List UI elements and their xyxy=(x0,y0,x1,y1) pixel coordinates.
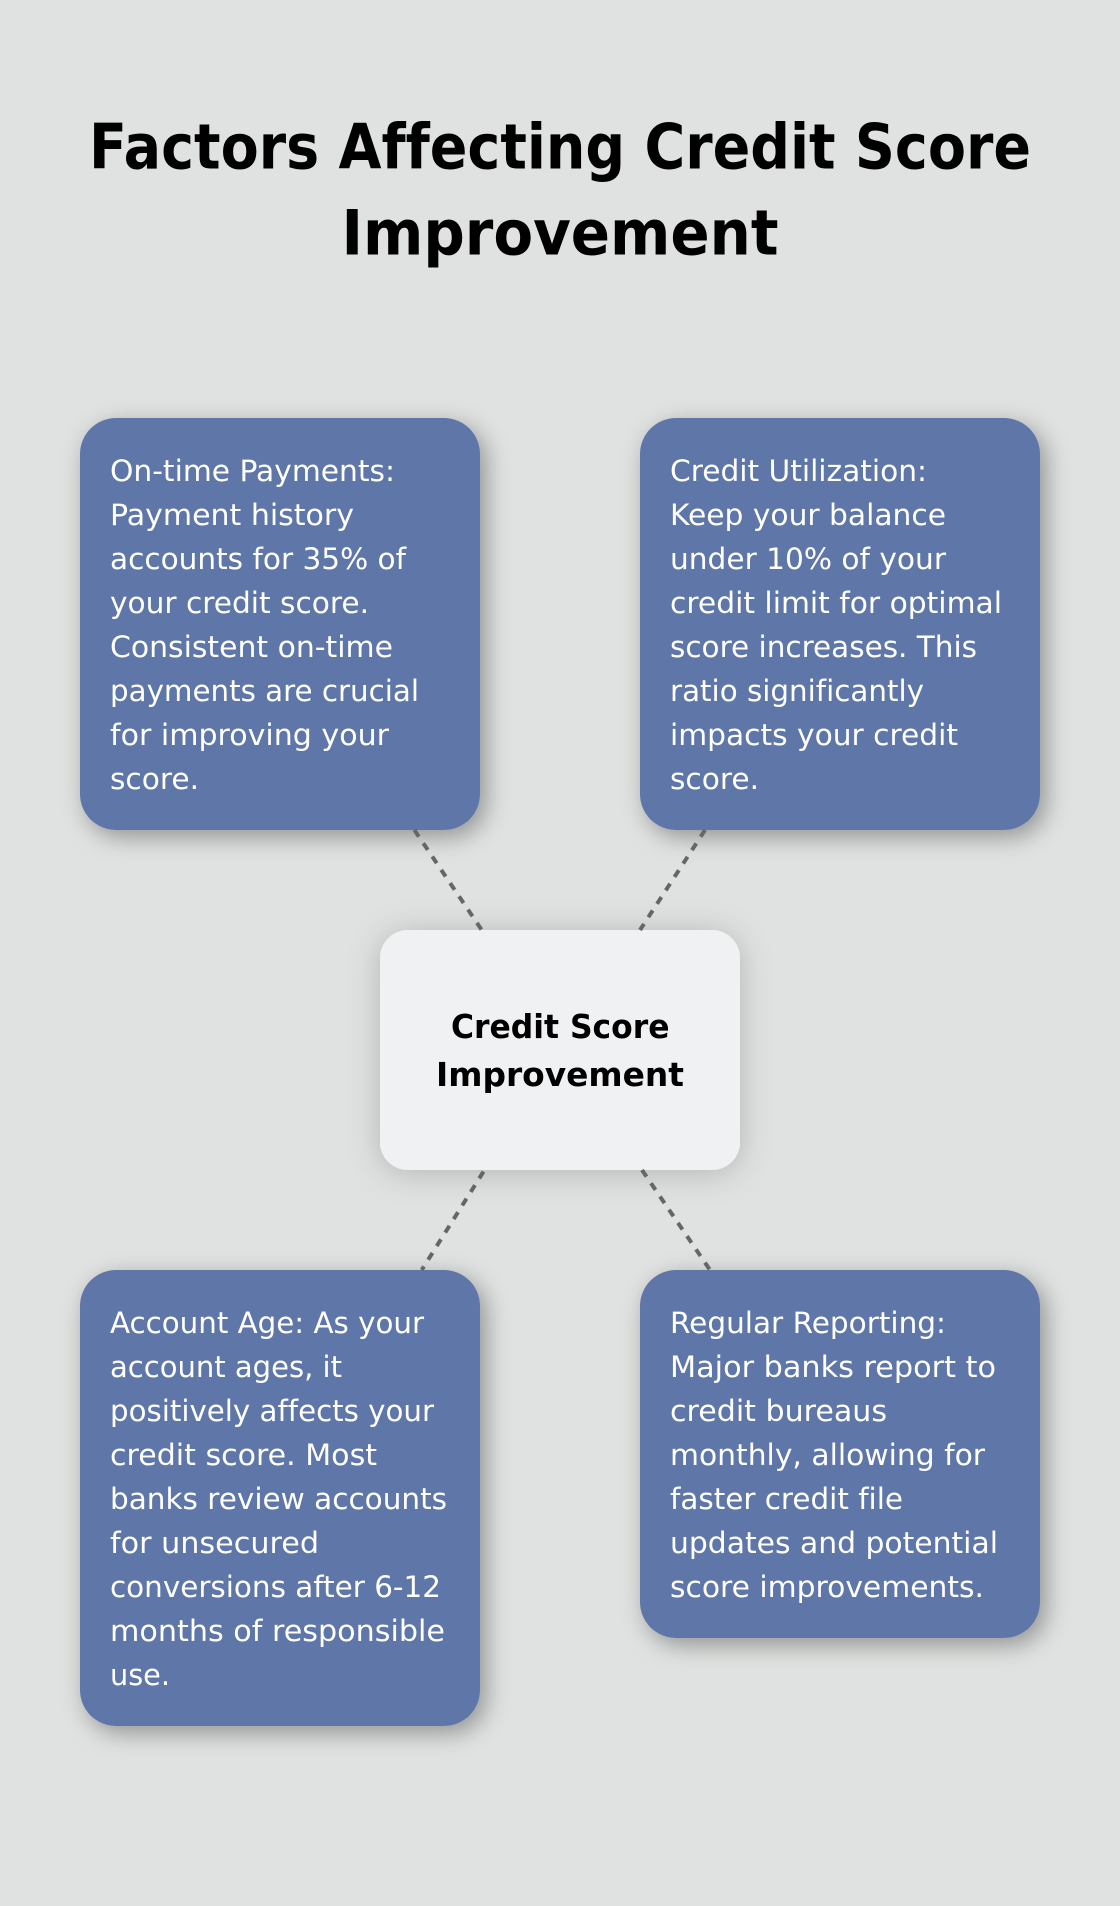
panel: center node xyxy=(380,930,740,1170)
text: regular reporting: updates and potential xyxy=(670,1526,998,1560)
text: credit utilization: Keep your balance xyxy=(670,498,946,532)
text: account age: credit score. Most xyxy=(110,1438,377,1472)
panel: credit utilization xyxy=(640,418,1040,830)
title: Improvement xyxy=(342,196,778,270)
text: regular reporting: Major banks report to xyxy=(670,1350,996,1384)
text: credit utilization: Credit Utilization: xyxy=(670,454,927,488)
text: on-time payments: for improving your xyxy=(110,718,390,752)
text: account age xyxy=(110,1306,447,1692)
text: on-time payments: Payment history xyxy=(110,498,354,532)
text: on-time payments: Consistent on-time xyxy=(110,630,393,664)
text: regular reporting: credit bureaus xyxy=(670,1394,887,1428)
center node label xyxy=(436,1007,684,1094)
text: regular reporting: Regular Reporting: xyxy=(670,1306,946,1340)
text: regular reporting: faster credit file xyxy=(670,1482,903,1516)
text: on-time payments: your credit score. xyxy=(110,586,369,620)
text: on-time payments xyxy=(110,454,419,796)
panel background: regular reporting xyxy=(640,1270,1040,1638)
connector: on-time payments to center xyxy=(414,830,482,930)
panel: regular reporting xyxy=(640,1270,1040,1638)
connector: center to regular reporting xyxy=(642,1170,710,1270)
panel background: credit utilization xyxy=(640,418,1040,830)
text: credit utilization: score increases. This xyxy=(670,630,977,664)
text: credit utilization: score. xyxy=(670,762,759,796)
text: on-time payments: accounts for 35% of xyxy=(110,542,407,576)
text: credit utilization: impacts your credit xyxy=(670,718,958,752)
text: account age: use. xyxy=(110,1658,170,1692)
text: account age: months of responsible xyxy=(110,1614,445,1648)
text: credit utilization xyxy=(670,454,1002,796)
center node label: Improvement xyxy=(436,1055,684,1094)
text: credit utilization: ratio significantly xyxy=(670,674,924,708)
text: account age: account ages, it xyxy=(110,1350,342,1384)
panel background: account age xyxy=(80,1270,480,1726)
text: account age: positively affects your xyxy=(110,1394,435,1428)
connector: credit utilization to center xyxy=(640,830,705,930)
connector: center to account age xyxy=(422,1172,484,1270)
text: credit utilization: under 10% of your xyxy=(670,542,947,576)
text: account age: Account Age: As your xyxy=(110,1306,425,1340)
title xyxy=(89,110,1031,270)
panel background: on-time payments xyxy=(80,418,480,830)
text: regular reporting xyxy=(670,1306,998,1604)
text: regular reporting: monthly, allowing for xyxy=(670,1438,986,1472)
panel: on-time payments xyxy=(80,418,480,830)
center node label: Credit Score xyxy=(451,1007,670,1046)
text: on-time payments: On-time Payments: xyxy=(110,454,395,488)
center node background xyxy=(380,930,740,1170)
text: regular reporting: score improvements. xyxy=(670,1570,984,1604)
text: account age: banks review accounts xyxy=(110,1482,447,1516)
text: on-time payments: payments are crucial xyxy=(110,674,419,708)
text: on-time payments: score. xyxy=(110,762,199,796)
panel: account age xyxy=(80,1270,480,1726)
text: account age: conversions after 6-12 xyxy=(110,1570,441,1604)
text: account age: for unsecured xyxy=(110,1526,319,1560)
text: credit utilization: credit limit for optimal xyxy=(670,586,1002,620)
